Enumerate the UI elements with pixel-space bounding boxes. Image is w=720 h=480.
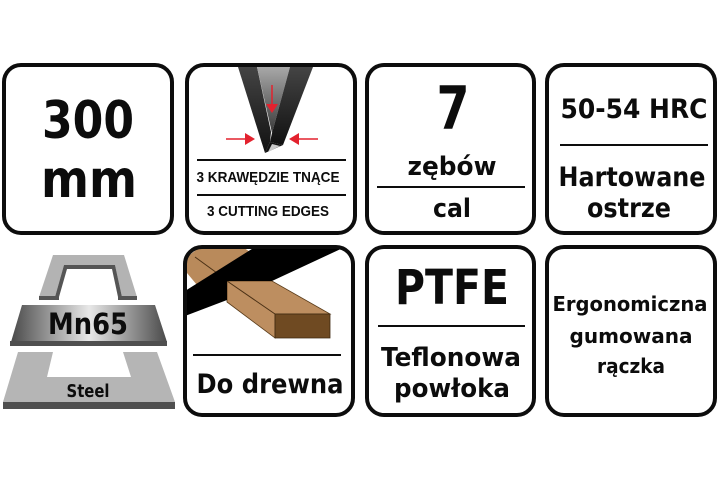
text: Ergonomiczna gumowana rączka <box>552 292 708 378</box>
icon: blade tip with three cutting edges <box>226 67 318 153</box>
icon: Mn65 steel layers <box>3 255 175 409</box>
text: Do drewna: Do drewna <box>196 369 344 400</box>
text: PTFE: PTFE <box>395 260 509 316</box>
text: Teflonowa powłoka: Teflonowa <box>381 343 521 373</box>
text: English cutting edges label: 3 CUTTING EDGES <box>207 203 329 220</box>
text: Ergonomiczna gumowana rączka: rączka <box>597 354 665 378</box>
text: Hartowane ostrze: Hartowane <box>558 162 706 193</box>
text: Teflonowa powłoka <box>381 343 521 404</box>
icon: bottom steel plate <box>3 352 175 409</box>
text: cal: cal <box>433 194 471 224</box>
panel: ergonomic handle <box>547 247 715 415</box>
panel: PTFE coating <box>367 247 534 415</box>
text: zębów: zębów <box>408 152 496 182</box>
text: Ergonomiczna gumowana rączka: Ergonomiczna <box>552 292 708 316</box>
text: 7: 7 <box>436 74 470 144</box>
text: Hartowane ostrze <box>558 162 706 224</box>
panel: 300 mm length <box>4 65 172 233</box>
text: Steel: Steel <box>66 381 110 402</box>
panel: for wood <box>185 247 353 415</box>
panel: hardness <box>547 65 715 233</box>
text: Ergonomiczna gumowana rączka: gumowana <box>570 324 692 348</box>
icon: Mn65 plate <box>10 305 167 346</box>
text: Hartowane ostrze: ostrze <box>587 193 671 224</box>
text: 300 mm <box>41 91 137 210</box>
text: Polish cutting edges label: 3 KRAWĘDZIE TNĄCE <box>196 169 340 186</box>
icon: top steel profile <box>39 255 137 300</box>
text: 50-54 HRC: 50-54 HRC <box>560 94 708 125</box>
icon: timber beam and saw blade <box>185 247 345 338</box>
text: 300 mm: 300 <box>42 91 134 151</box>
panel: 7 teeth per inch <box>367 65 534 233</box>
text: Teflonowa powłoka: powłoka <box>394 374 510 404</box>
text: 300 mm: mm <box>41 150 137 210</box>
panel: 3 cutting edges <box>187 65 355 233</box>
icon: red arrows <box>226 85 318 145</box>
text: Mn65: Mn65 <box>48 307 128 341</box>
